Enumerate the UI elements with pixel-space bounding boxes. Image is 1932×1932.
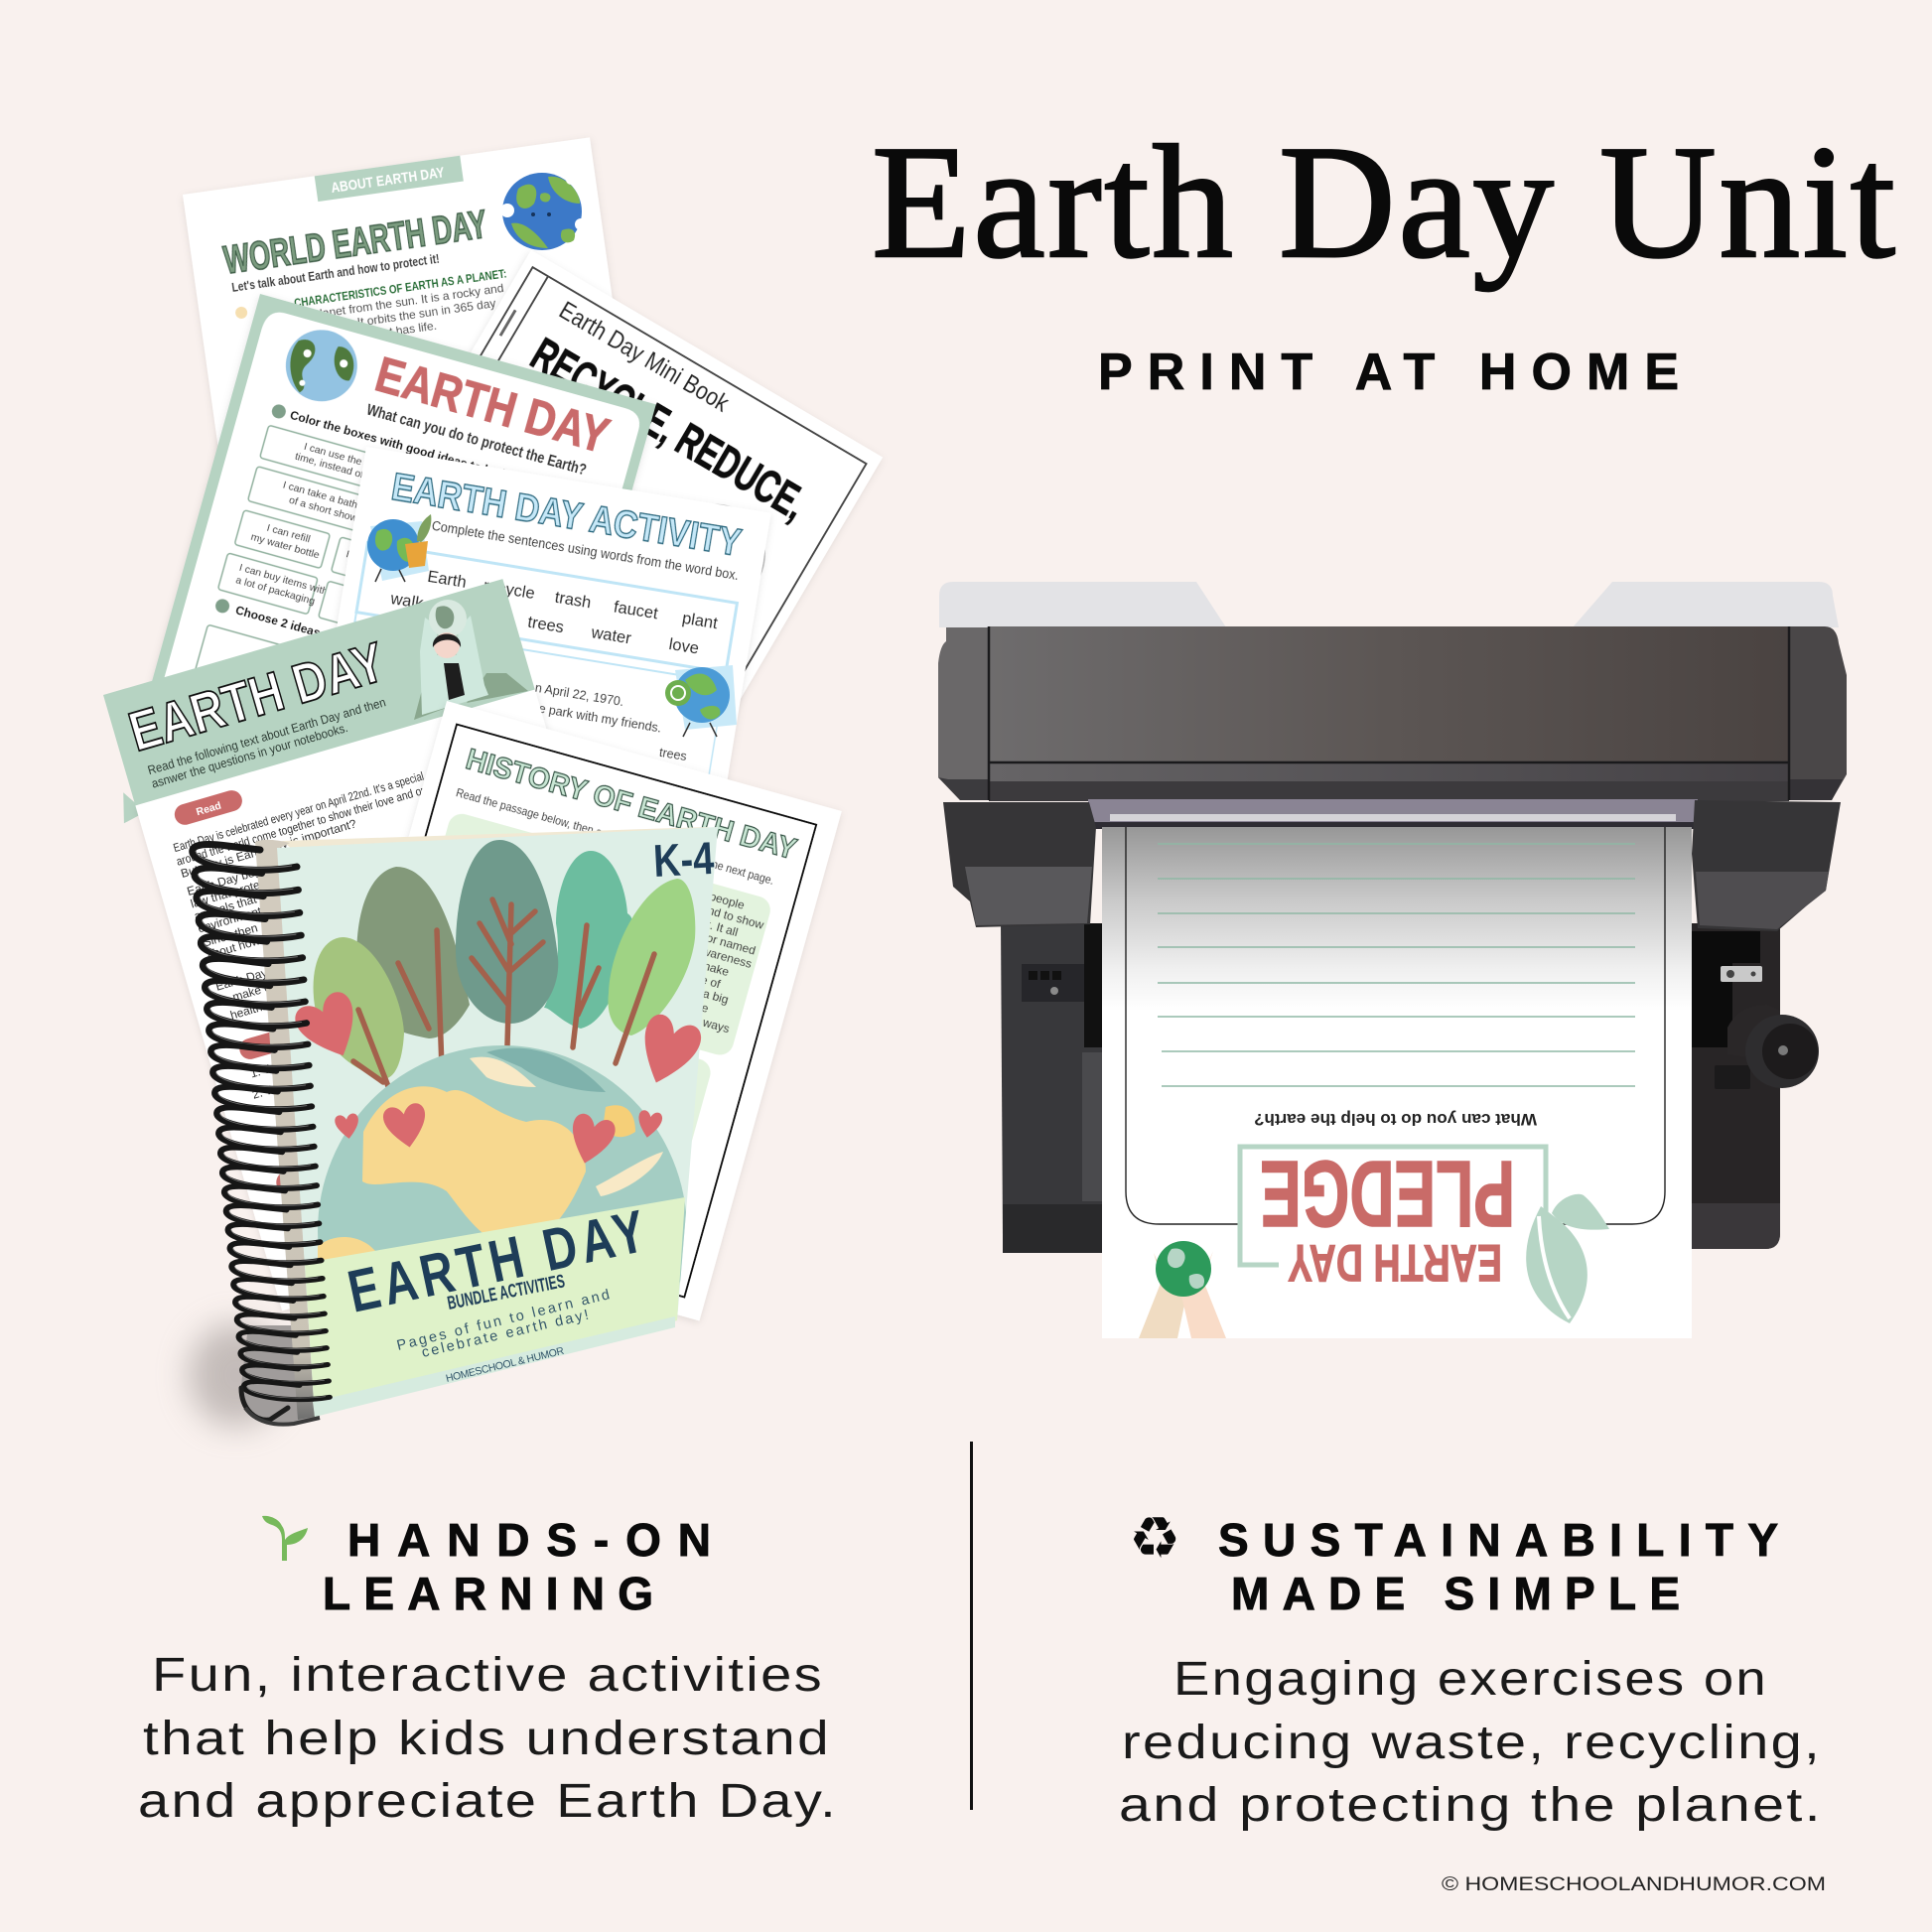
printer knob arm	[1727, 1005, 1780, 1062]
worksheet: read the following text: law that protects	[189, 874, 276, 910]
body text: and protecting the planet.	[1119, 1779, 1823, 1832]
worksheet: earth day activity: n April 22, 1970.	[534, 681, 624, 709]
shadow base under spiral	[241, 1325, 320, 1425]
worksheet: read the following text: Earth Day is celebrated every year on April 22nd. It's a special	[172, 769, 425, 855]
worksheet: about earth day: It orbits the sun in 365 day	[356, 296, 496, 330]
worksheet: earth day what can you do: a lot of packaging	[234, 574, 317, 608]
cover title: EARTH DAY	[343, 1196, 655, 1325]
icon: hands holding earth	[1139, 1241, 1226, 1338]
worksheet: earth day activity: water	[589, 623, 633, 648]
worksheet: read the following text: 2. What	[250, 1077, 295, 1102]
worksheet: read the following text: Earth Day	[214, 965, 269, 994]
upside-down earth day word: EARTH DAY	[1288, 1233, 1502, 1292]
icon: smiling earth	[500, 173, 587, 250]
panel: hands-on learning	[138, 1514, 838, 1828]
worksheet: read the following text: Since then	[202, 920, 259, 950]
worksheet: earth day activity: Complete the sentences using words from the word box.	[431, 518, 740, 583]
printer right label	[1721, 966, 1762, 982]
cover tagline: Pages of fun to learn and	[395, 1287, 612, 1354]
writing lines	[1158, 844, 1635, 1086]
worksheet: read the following text: environment	[197, 903, 264, 935]
worksheet: history of earth day: e of	[699, 972, 723, 991]
body text: that help kids understand	[143, 1713, 831, 1765]
printer lid	[989, 626, 1789, 761]
cover publisher: HOMESCHOOL & HUMOR	[445, 1345, 566, 1385]
printer	[938, 582, 1847, 1338]
illustration: woman holding globe	[414, 600, 528, 720]
heading: sustainability: SUSTAINABILITY	[1218, 1514, 1778, 1566]
body text	[1119, 1653, 1823, 1832]
cover trees	[314, 840, 695, 1099]
cover green panel	[305, 1197, 685, 1417]
worksheet: history of earth day: r	[683, 1066, 691, 1080]
worksheet: read the following text: 1. What	[248, 1055, 293, 1080]
printer side blocks	[938, 627, 989, 800]
body text	[138, 1649, 838, 1828]
book shadow	[189, 1323, 284, 1427]
spiral-bound book	[189, 827, 718, 1427]
icon: sprout	[262, 1516, 308, 1561]
icon: recycle: ♻	[1129, 1504, 1180, 1572]
cover grade label: K-4	[652, 832, 716, 887]
worksheet: earth day what can you do: Choose 2 ideas to	[234, 603, 336, 644]
printer right arm	[1692, 800, 1841, 931]
worksheet: read the following text: But why is Earth Day is important?	[179, 816, 358, 881]
worksheet: earth day activity: EARTH DAY ACTIVITY	[388, 466, 745, 565]
worksheet: history of earth day: ways	[700, 1015, 731, 1035]
worksheet: read the following text: to make care	[218, 975, 289, 1008]
worksheet: earth day what can you do	[135, 294, 656, 854]
worksheet: mini book: Earth Day Mini Book	[554, 297, 734, 418]
worksheet: about earth day: t has life.	[388, 319, 438, 339]
worksheet: earth day what can you do: I can use the car all the	[303, 441, 410, 482]
worksheet: read the following text: animals that live	[193, 886, 279, 923]
spiral binding	[193, 845, 330, 1425]
worksheet: earth day what can you do: I can buy items with	[238, 562, 330, 598]
worksheet: read the following text	[88, 579, 682, 1315]
heading: made simple: MADE SIMPLE	[1231, 1568, 1680, 1619]
worksheet: read the following text: Earth Day began	[186, 860, 275, 898]
cover tagline: celebrate earth day!	[420, 1308, 590, 1361]
subtitle: PRINT AT HOME	[1098, 344, 1679, 401]
worksheet: earth day what can you do: What can you do to protect the Earth?	[364, 402, 588, 479]
worksheet: about earth day: planet from the sun. It is a rocky and	[313, 281, 504, 322]
worksheet: about earth day: ABOUT EARTH DAY	[330, 164, 446, 197]
copyright: © HOMESCHOOLANDHUMOR.COM	[1442, 1873, 1826, 1895]
worksheet: earth day activity: recycle	[482, 577, 536, 603]
icon: flower globe	[277, 322, 365, 410]
worksheet: earth day what can you do: my water bottle	[249, 531, 321, 562]
heading: learning: LEARNING	[323, 1568, 653, 1619]
worksheet: read the following text: Read	[195, 800, 222, 818]
worksheet: earth day what can you do: I can take a bath instead	[282, 480, 394, 521]
worksheet: read the following text: about how	[205, 933, 262, 962]
pledge title box	[1240, 1147, 1546, 1281]
worksheet: about earth day: WORLD EARTH DAY	[221, 203, 489, 283]
cover bottom strip	[313, 1316, 675, 1417]
book cover	[277, 827, 718, 1417]
worksheet: history of earth day: a big	[701, 987, 730, 1007]
printer left control panel	[1022, 964, 1084, 1002]
worksheet: history of earth day: Read the passage below, then answer the questions on the next page.	[455, 785, 775, 888]
panel: sustainability made simple	[1119, 1504, 1823, 1832]
worksheet: earth day activity: trees	[526, 614, 565, 636]
worksheet: history of earth day: s	[670, 1091, 680, 1106]
worksheet: read the following text: asnwer the questions in your notebooks.	[150, 721, 349, 791]
worksheet: earth day what can you do: EARTH DAY	[369, 346, 616, 464]
printer lower body left	[1001, 923, 1104, 1253]
icon: earth with plant	[367, 514, 431, 582]
worksheet: history of earth day	[305, 701, 842, 1320]
body text: Engaging exercises on	[1173, 1653, 1768, 1706]
vertical divider	[970, 1442, 973, 1810]
worksheet: mini book	[330, 250, 883, 799]
heading: hands-on: HANDS-ON	[347, 1514, 711, 1566]
icon: leaves	[1526, 1194, 1609, 1323]
worksheet: read the following text: EARTH DAY	[122, 629, 391, 763]
worksheet: read the following text: healthier	[228, 996, 276, 1023]
worksheet: earth day activity: trash	[554, 589, 593, 613]
worksheet: earth day activity: walk	[388, 590, 425, 613]
worksheet: history of earth day: t. It all	[705, 917, 740, 939]
worksheet: read the following text: Read the following text about Earth Day and then	[146, 695, 387, 777]
worksheet: history of earth day: th	[676, 1078, 689, 1094]
cover hearts	[291, 988, 705, 1169]
worksheet: earth day what can you do: of a short shower	[288, 494, 368, 527]
printer knob	[1745, 1015, 1819, 1088]
book spine	[255, 840, 315, 1420]
body text: Fun, interactive activities	[152, 1649, 824, 1702]
worksheet: about earth day	[183, 137, 642, 568]
printer left arm	[943, 802, 1096, 927]
worksheet: earth day what can you do: I can	[345, 548, 369, 566]
worksheet: history of earth day: nd to show	[706, 903, 765, 932]
worksheet: about earth day: CHARACTERISTICS OF EARTH AS A PLANET:	[293, 266, 507, 310]
upside-down prompt: What can you do to help the earth?	[1254, 1110, 1537, 1128]
icon: earth with recycle badge	[665, 665, 737, 737]
cover globe	[318, 1045, 686, 1285]
worksheet: earth day what can you do: time, instead of walking	[294, 451, 401, 491]
body text: and appreciate Earth Day.	[138, 1775, 838, 1828]
worksheet: about earth day: Let's talk about Earth and how to protect it!	[231, 252, 440, 295]
printer paper slot	[1088, 799, 1698, 829]
mint corner tab	[116, 788, 147, 823]
worksheet: history of earth day: HISTORY OF EARTH DAY	[463, 743, 800, 866]
worksheet: earth day activity: he park with my friends.	[531, 700, 662, 736]
worksheet: earth day what can you do: Color the boxes with good ideas to look after the earth	[289, 408, 590, 504]
printer rear trays	[939, 582, 1226, 627]
worksheet: earth day activity: love	[667, 635, 700, 658]
worksheet collage	[88, 137, 883, 1320]
printer lower body right	[1688, 923, 1780, 1249]
body text: reducing waste, recycling,	[1122, 1717, 1822, 1769]
worksheet: history of earth day: people	[708, 890, 747, 912]
pledge frame	[1126, 827, 1665, 1224]
worksheet: earth day activity: Earth	[426, 568, 468, 592]
title: Earth Day Unit	[872, 113, 1895, 292]
worksheet: earth day what can you do: I can refill	[265, 522, 312, 545]
worksheet: read the following text: around the world come together to show their love and op	[175, 782, 429, 869]
page edge	[282, 827, 718, 849]
worksheet: history of earth day: e	[700, 1001, 710, 1016]
worksheet: earth day activity: plant	[681, 610, 719, 632]
printed pledge sheet	[1102, 827, 1692, 1338]
worksheet: history of earth day: nake	[702, 959, 731, 979]
worksheet: earth day activity: faucet	[613, 599, 659, 623]
upside-down pledge word: PLEDGE	[1260, 1141, 1515, 1246]
worksheet: earth day activity	[314, 447, 771, 836]
worksheet: mini book: RECYCLE, REDUCE,	[523, 328, 816, 529]
cover subtitle: BUNDLE ACTIVITIES	[446, 1271, 567, 1314]
worksheet: history of earth day: wareness	[700, 943, 754, 971]
worksheet: earth day activity: trees	[658, 746, 688, 763]
worksheet: history of earth day: or named	[705, 930, 758, 958]
